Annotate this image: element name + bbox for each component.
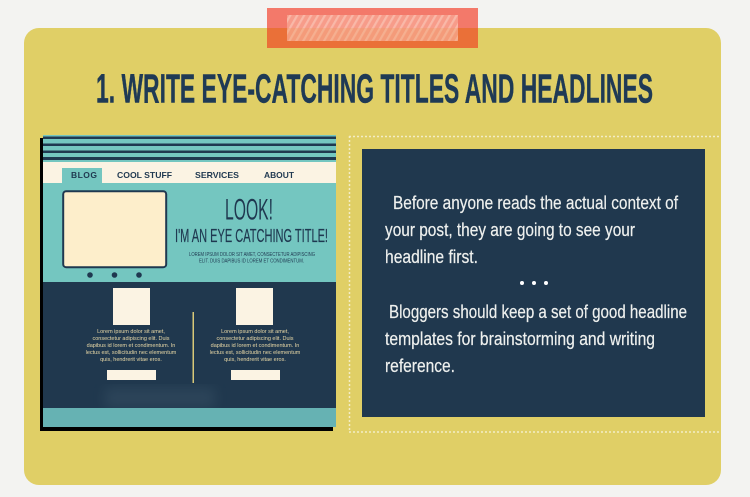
navigation bar: ABOUT — [264, 170, 295, 180]
column one: lectus est, sollicitudin nec elementum — [86, 350, 177, 356]
panel: explanation text — [362, 149, 705, 417]
column one — [86, 288, 177, 380]
column one: consectetur adipiscing elit. Duis — [92, 336, 170, 342]
tape — [267, 8, 478, 48]
paragraph two: Bloggers should keep a set of good headline — [389, 302, 687, 322]
column divider — [192, 312, 194, 383]
mockup shadow — [40, 138, 333, 431]
distressed texture — [105, 388, 215, 408]
monitor image placeholder — [63, 191, 166, 278]
mockup page teal — [43, 135, 336, 283]
panel: website mockup — [40, 135, 336, 431]
column two: consectetur adipiscing elit. Duis — [216, 336, 294, 342]
footer band — [43, 408, 336, 427]
dotted frame — [349, 136, 721, 432]
mockup headline: I'M AN EYE CATCHING TITLE! — [175, 225, 328, 246]
paragraph one: your post, they are going to see your — [385, 220, 635, 240]
header stripes — [43, 136, 336, 160]
paragraph two: reference. — [385, 356, 455, 376]
navy content area — [43, 282, 336, 408]
navigation bar: SERVICES — [195, 170, 239, 180]
paragraph one: headline first. — [385, 247, 478, 267]
navigation bar — [43, 162, 336, 183]
paragraph one — [385, 193, 679, 267]
column two: dapibus id lorem et condimentum. In — [211, 343, 299, 349]
mockup headline — [175, 194, 328, 264]
column two: Lorem ipsum dolor sit amet, — [221, 329, 289, 335]
mockup headline: LOOK! — [225, 194, 273, 226]
navigation bar: BLOG — [71, 170, 97, 180]
column two: quis, hendrerit vitae eros. — [224, 357, 286, 363]
column one: quis, hendrerit vitae eros. — [100, 357, 162, 363]
column one: Lorem ipsum dolor sit amet, — [97, 329, 165, 335]
paragraph two — [385, 302, 687, 376]
mockup headline: ELIT. DUIS DAPIBUS ID LOREM ET CONDIMENTUM. — [199, 258, 304, 264]
paragraph two: templates for brainstorming and writing — [385, 329, 655, 349]
separator dots — [520, 281, 548, 285]
navigation bar: COOL STUFF — [117, 170, 172, 180]
mockup headline: LOREM IPSUM DOLOR SIT AMET, CONSECTETUR ADIPISCING — [189, 252, 315, 258]
column two: lectus est, sollicitudin nec elementum — [210, 350, 301, 356]
paragraph one: Before anyone reads the actual context of — [393, 193, 679, 213]
column two — [210, 288, 301, 380]
column one: dapibus id lorem et condimentum. In — [87, 343, 175, 349]
